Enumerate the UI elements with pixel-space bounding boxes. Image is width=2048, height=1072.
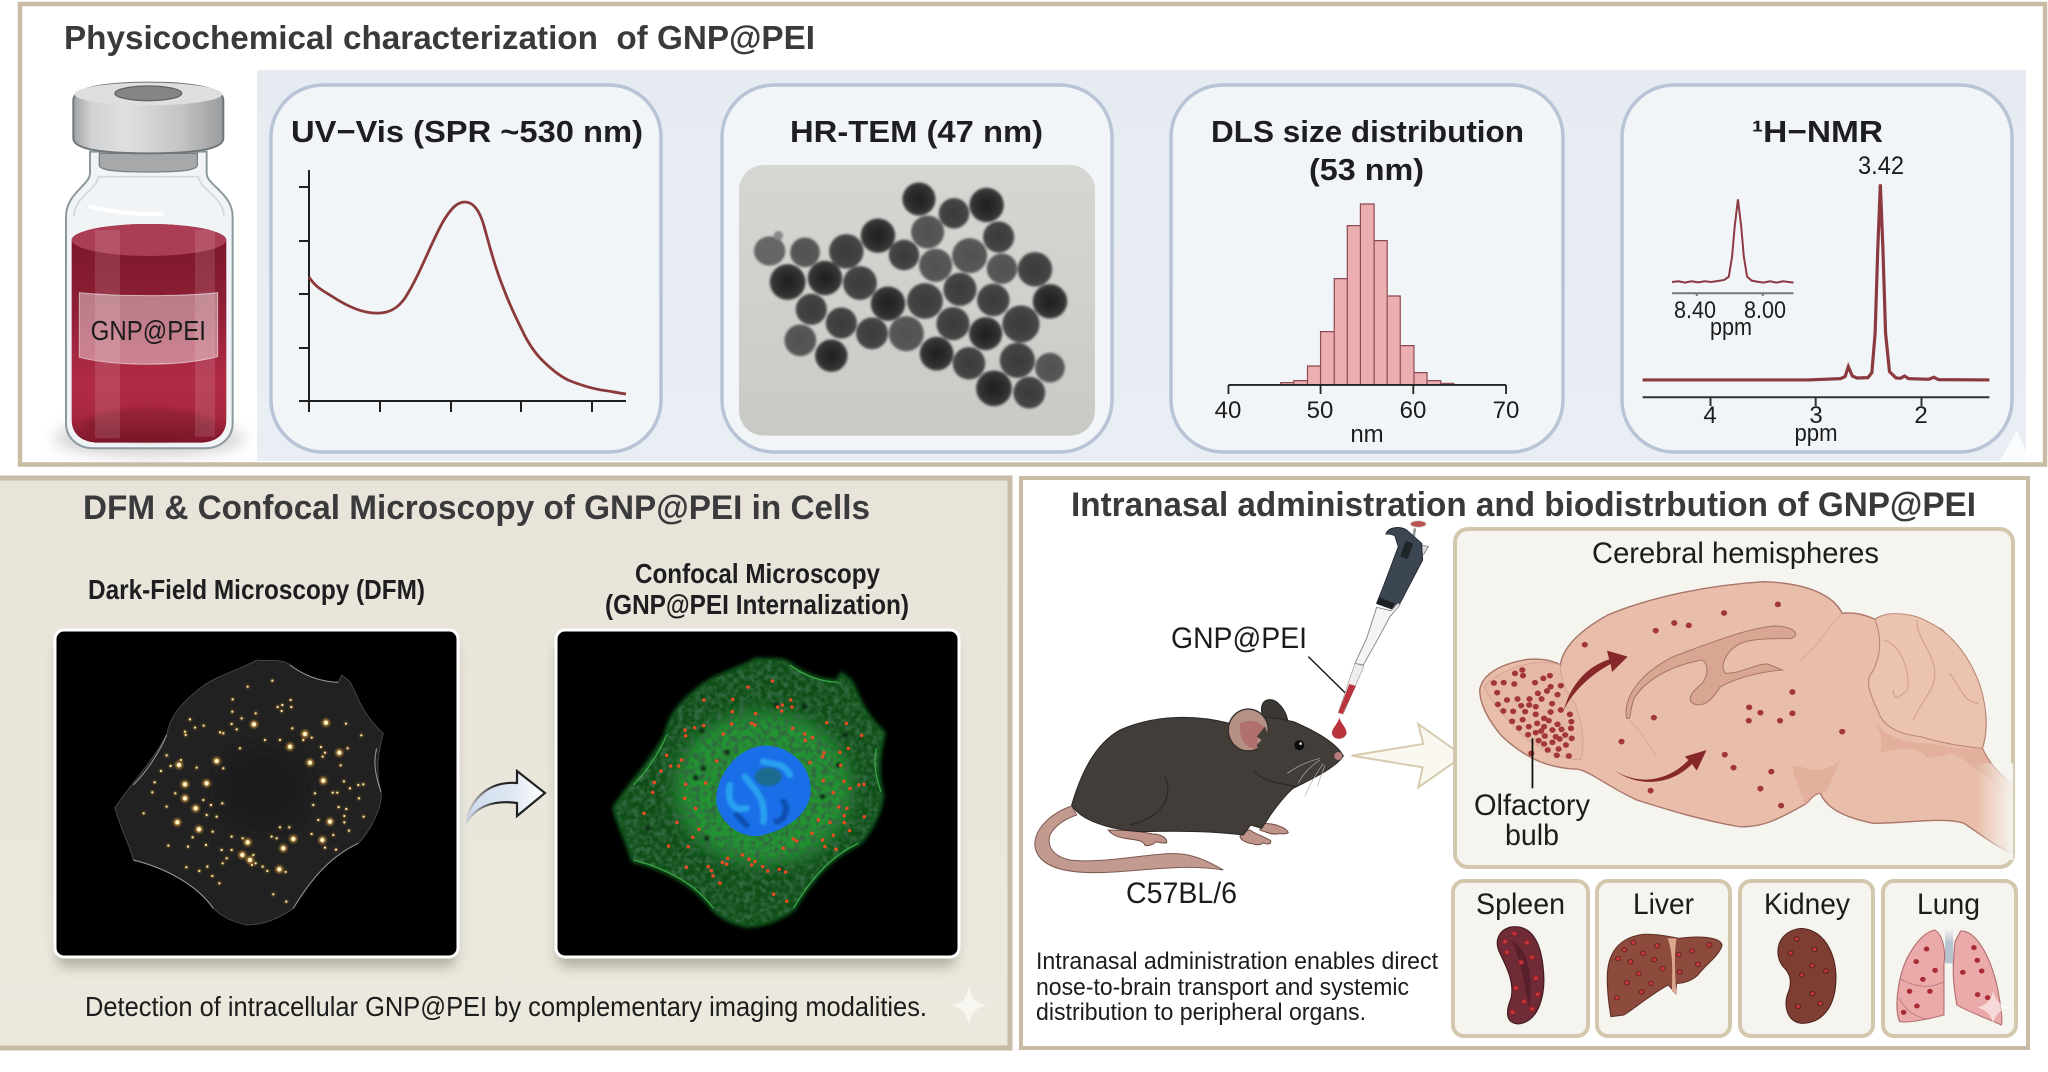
icon: mouse tail [1035,806,1223,873]
lateral ventricle [1626,626,1796,718]
heading: intranasal administration: Intranasal administration and biodistrbution of GNP@PEI [1071,486,1976,524]
card: spleen [1453,881,1588,1036]
arrow: DFM to confocal [465,771,545,826]
heading: DLS: DLS size distribution [1211,114,1524,149]
panel: physicochemical characterization [20,4,2045,464]
cerebellum [1869,614,1986,748]
blue background band [257,70,2026,461]
text block: nose-to-brain description: nose-to-brain transport and systemic [1036,974,1409,1001]
arrow: lower transport [1615,750,1707,782]
card: lung: Lung [1917,888,1980,921]
card: kidney: Kidney [1764,888,1850,921]
chart curve: SPR absorbance peak [309,202,626,394]
leader line [1308,657,1345,693]
card: UV-Vis [271,85,661,452]
icon: pipette [1338,521,1428,714]
icon: mouse feet [1108,823,1288,846]
midbrain shading [1793,717,2011,805]
axis labels: DLS: 40 [1215,397,1241,424]
micrograph: TEM nanoparticles [739,165,1095,436]
label: olfactory bulb: bulb [1505,819,1559,852]
sparkle [951,985,987,1027]
spectrum: NMR [1643,184,1989,406]
heading: NMR: ¹H−NMR [1752,114,1883,149]
text block: nose-to-brain description: distribution to peripheral organs. [1036,999,1366,1026]
heading: physicochemical characterization: Physicochemical characterization of GNP@PEI [64,19,815,56]
card: liver [1597,881,1730,1036]
card: HR-TEM [722,85,1112,452]
axis labels: NMR: ppm [1794,420,1838,447]
card: DLS: (53 nm) [1309,152,1424,187]
icon: droplet [1332,717,1347,739]
label: cerebral hemispheres: Cerebral hemispheres [1592,537,1879,570]
axis labels: DLS: 70 [1493,397,1519,424]
subheading: dark-field: Dark-Field Microscopy (DFM) [88,574,425,605]
arrow: mouse to brain [1352,724,1463,787]
axis labels: NMR: 8.40 [1674,297,1716,324]
heading: UV-Vis: UV−Vis (SPR ~530 nm) [291,114,643,149]
icon: vial of GNP@PEI [54,83,244,457]
axis labels: DLS: nm [1350,421,1384,448]
illustration: sagittal brain [1480,582,2013,860]
icon: kidney [1778,928,1836,1023]
organ cards [1453,881,2016,1036]
axis labels: NMR: ppm [1710,314,1752,341]
panel: cerebral hemispheres [1455,529,2013,867]
axis labels: DLS [1215,397,1519,448]
card: kidney [1740,881,1873,1036]
card: lung [1883,881,2016,1036]
icon: liver [1607,934,1722,1017]
image: dark-field cell [55,630,458,967]
card: liver: Liver [1633,888,1694,921]
image: confocal cell [556,630,959,967]
axis labels: NMR: 2 [1914,402,1928,429]
icon: spleen [1497,927,1544,1024]
leader line: olfactory bulb [1530,738,1535,788]
axis labels: NMR: 8.00 [1744,297,1786,324]
subheading: confocal [605,558,909,620]
caption: imaging modalities: Detection of intracellular GNP@PEI by complementary imaging modalities. [85,991,927,1022]
axis labels: NMR [1674,297,1928,447]
chart axes: UV-Vis [299,170,626,412]
icon: lungs [1897,928,2002,1025]
icon: mouse front ear [1228,709,1268,751]
panel: DFM and confocal microscopy [0,478,1010,1048]
label: olfactory bulb: Olfactory [1474,789,1590,822]
heading: HR-TEM: HR-TEM (47 nm) [790,114,1043,149]
label: GNP@PEI: GNP@PEI [1171,622,1307,655]
subheading: confocal: Confocal Microscopy [635,558,881,589]
icon: mouse body [1072,717,1343,835]
organ illustrations [1497,927,2011,1025]
vial label text: GNP@PEI [91,315,206,346]
panel: intranasal administration and biodistribution [1021,478,2028,1048]
histogram: size distribution [1228,204,1506,394]
label: mouse strain: C57BL/6 [1126,877,1237,910]
axis labels: NMR: 3 [1809,402,1823,429]
label: olfactory bulb [1474,789,1590,852]
axis labels: DLS: 50 [1307,397,1333,424]
card: 1H-NMR [1622,85,2012,452]
nanoparticle dots [1494,604,1842,806]
card: DLS [1171,85,1563,452]
icon: mouse back ear [1261,700,1288,727]
sparkle fragment [2000,430,2030,461]
text block: nose-to-brain description: Intranasal administration enables direct [1036,948,1438,975]
subheading: confocal: (GNP@PEI Internalization) [605,589,909,620]
peak label: 3.42 [1858,152,1904,180]
heading: DFM and confocal: DFM & Confocal Microscopy of GNP@PEI in Cells [83,489,870,527]
icon: mouse nose [1334,752,1342,760]
text block: nose-to-brain description [1036,948,1438,1026]
axis labels: DLS: 60 [1400,397,1426,424]
icon: mouse eye [1294,740,1304,750]
illustration: mouse with pipette [1035,521,1463,873]
card: spleen: Spleen [1476,888,1565,921]
arrow: upper transport [1564,651,1628,710]
axis labels: NMR: 4 [1703,402,1717,429]
